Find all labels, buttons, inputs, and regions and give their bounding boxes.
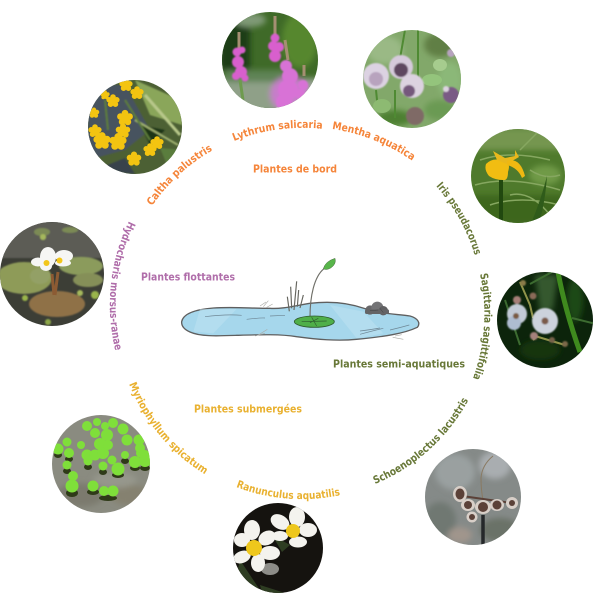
section heading: Plantes de bord: Plantes de bord <box>253 162 337 176</box>
label: Ranunculus aquatilis: Ranunculus aquatilis <box>236 480 340 502</box>
reeds <box>287 281 303 311</box>
photo: Lythrum salicaria <box>220 10 320 112</box>
label: Caltha palustris: Caltha palustris <box>147 146 212 204</box>
section heading: Plantes flottantes: Plantes flottantes <box>141 270 235 284</box>
pond water <box>182 302 419 340</box>
photo: Ranunculus aquatilis <box>231 503 323 593</box>
photo: Iris pseudacorus <box>470 128 566 226</box>
lily pad <box>294 316 334 327</box>
grass tufts <box>255 301 403 339</box>
photo: Mentha aquatica <box>362 28 462 130</box>
label: Myriophyllum spicatum: Myriophyllum spicatum <box>129 382 207 474</box>
section heading: Plantes submergées: Plantes submergées <box>194 402 302 416</box>
photo: Myriophyllum spicatum <box>52 415 151 513</box>
label: Lythrum salicaria: Lythrum salicaria <box>232 120 322 141</box>
label: Schoenoplectus lacustris: Schoenoplectus lacustris <box>373 398 468 484</box>
label: Hydrocharis morsus-ranae: Hydrocharis morsus-ranae <box>110 222 136 350</box>
label: Iris pseudacorus: Iris pseudacorus <box>436 182 480 255</box>
illustration: pond <box>182 258 419 340</box>
label: Sagittaria sagittifolia: Sagittaria sagittifolia <box>473 274 492 380</box>
photo: Hydrocharis morsus-ranae <box>0 222 104 326</box>
rocks <box>365 302 389 315</box>
photo: Sagittaria sagittifolia <box>496 271 596 369</box>
cattail <box>310 258 335 317</box>
photo: Caltha palustris <box>88 78 182 174</box>
label: Mentha aquatica: Mentha aquatica <box>332 121 414 160</box>
photo: Schoenoplectus lacustris <box>424 449 521 545</box>
section heading: Plantes semi-aquatiques: Plantes semi-aquatiques <box>333 358 465 370</box>
